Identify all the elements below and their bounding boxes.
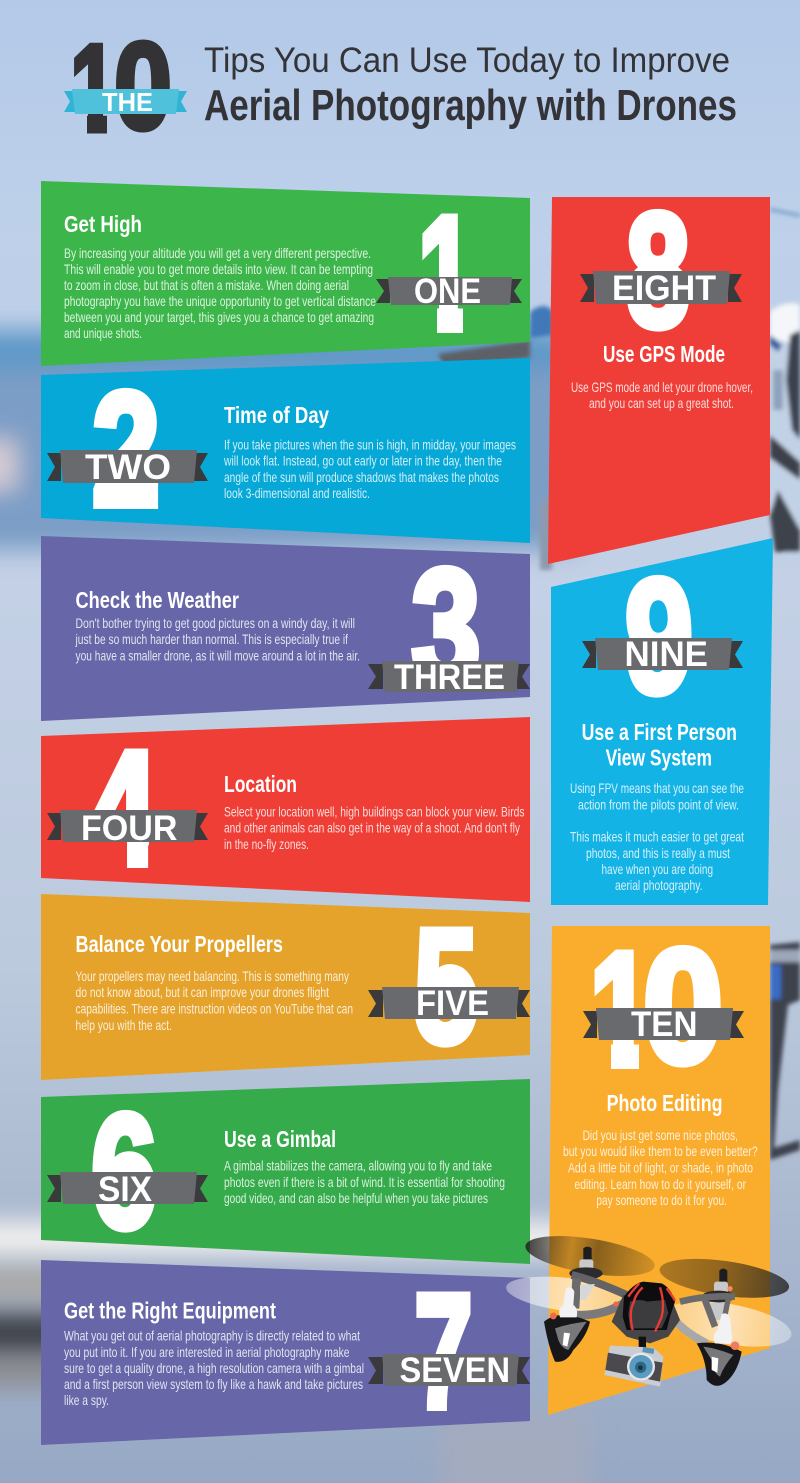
drone body [612,1282,680,1343]
body text [570,780,744,893]
THE ribbon [64,87,187,117]
arms [572,1275,735,1343]
panel 8: Use GPS Mode [548,180,770,564]
THE ribbon: THE [102,87,153,117]
heading: Photo Editing [607,1090,722,1116]
body text: Your propellers may need balancing. This is something many [76,968,349,984]
ribbon SIX: SIX [98,1170,153,1209]
body text [75,615,360,664]
body text: photos, and this is really a must [586,845,730,861]
body text: A gimbal stabilizes the camera, allowing you to fly and take [224,1158,492,1174]
body text: between you and your target, this gives you a chance to get amazing [64,309,374,325]
heading: Use a First Person [582,719,737,745]
body text: have when you are doing [602,861,713,877]
arm nub [613,1301,619,1307]
ribbon EIGHT [580,269,742,308]
heading: Use a Gimbal [224,1126,336,1152]
body text: like a spy. [64,1392,109,1408]
ribbon EIGHT: EIGHT [612,269,716,308]
body text: you have a smaller drone, as it will move around a lot in the air. [76,648,360,664]
body text [64,1328,364,1408]
number 8: 8 [626,180,690,361]
ribbon TEN [583,1005,744,1044]
big number 10: 0 [114,18,172,156]
number 6: 6 [91,1081,157,1262]
ribbon ONE [376,272,522,311]
front right leg [697,1313,742,1386]
ribbon NINE: NINE [624,635,708,674]
ribbon FOUR [47,809,208,848]
ribbon FIVE [368,984,530,1023]
number 7: 7 [414,1261,472,1442]
body text [224,1158,505,1206]
heading: Time of Day [224,402,329,428]
ribbon SEVEN: SEVEN [400,1351,510,1390]
body text: Select your location well, high buildings can block your view. Birds [224,804,524,820]
ribbon ONE: ONE [414,272,481,311]
body text [563,1127,758,1208]
body text: look 3-dimensional and realistic. [224,485,370,501]
title block [64,40,736,134]
panel 10: Photo Editing [548,916,770,1415]
ribbon SIX [47,1170,208,1209]
ribbon TWO: TWO [85,448,171,487]
body text: good video, and can also be helpful when you take pictures [224,1190,488,1206]
heading: Get the Right Equipment [64,1298,276,1324]
body text: help you with the act. [76,1017,172,1033]
ribbon FOUR: FOUR [81,809,178,848]
panel 6: Use a Gimbal [41,1079,530,1264]
camera [604,1337,663,1387]
body text: in the no-fly zones. [224,836,309,852]
body text: By increasing your altitude you will get a very different perspective. [64,245,371,261]
body text: do not know about, but it can improve your drones flight [76,984,329,1000]
body text: What you get out of aerial photography is directly related to what [64,1328,360,1344]
number 1: 1 [418,183,474,364]
ribbon TWO [47,448,208,487]
heading [582,719,737,771]
number 10 [594,944,721,1069]
front left leg [544,1287,590,1362]
heading: Use GPS Mode [603,341,725,367]
panel 2: Time of Day [41,358,530,543]
body text: sure to get a quality drone, a high resolution camera with a gimbal [64,1360,364,1376]
body text: photos even if there is a bit of wind. It is essential for shooting [224,1174,505,1190]
big number 10 [74,40,170,134]
big number 10: 1 [70,20,117,158]
number 9: 9 [625,546,693,727]
body text: angle of the sun will produce shadows that makes the photos [224,469,499,485]
body text: If you take pictures when the sun is high, in midday, your images [224,436,516,452]
body text: action from the pilots point of view. [578,796,739,812]
body text: Don't bother trying to get good pictures on a windy day, it will [76,615,355,631]
body text: and unique shots. [64,325,142,341]
ribbon NINE [582,635,743,674]
heading: Get High [64,211,142,237]
number 10: 1 [590,919,652,1100]
panel 7: Get the Right Equipment [41,1260,530,1445]
body text: photography you have the unique opportunity to get vertical distance [64,293,376,309]
rear rotors [569,1247,735,1303]
body text: This will enable you to get more details into view. It can be tempting [64,261,373,277]
ribbon THREE: THREE [394,658,505,697]
body text [571,379,753,411]
body text: to zoom in close, but that is often a mistake. When doing aerial [64,277,349,293]
panel 1: Get High [41,181,530,366]
body text: and you can set up a great shot. [589,395,734,411]
heading: View System [606,745,712,771]
back propellers [523,1229,791,1305]
body text: pay someone to do it for you. [596,1192,727,1208]
panel 3: Check the Weather [41,536,530,721]
body text [224,804,524,852]
title line 1: Tips You Can Use Today to Improve [204,41,730,80]
number 10: 0 [643,916,723,1097]
ribbon FIVE: FIVE [416,984,489,1023]
number 3: 3 [412,536,480,717]
number 4: 4 [89,718,157,899]
heading: Location [224,771,297,797]
body text [223,436,516,501]
body text [64,245,376,341]
front propellers [504,1271,795,1355]
heading: Check the Weather [76,587,239,613]
body text [76,968,353,1033]
body text: and other animals can also get in the way of a shoot. And don't fly [224,820,520,836]
body text: Did you just get some nice photos, [583,1127,738,1143]
body text: just be so much harder than normal. This is especially true if [75,631,348,647]
body text: you put into it. If you are interested in aerial photography make [64,1344,350,1360]
body text: and a first person view system to fly like a hawk and take pictures [64,1376,363,1392]
body text: aerial photography. [615,877,702,893]
heading: Balance Your Propellers [76,931,283,957]
panel 9: Use a First Person View System [551,538,773,905]
body text: capabilities. There are instruction videos on YouTube that can [76,1000,353,1016]
number 5: 5 [414,896,478,1077]
panel 4: Location [41,717,530,902]
icon: drone with camera [504,1229,795,1387]
panel 5: Balance Your Propellers [41,894,530,1080]
body text: will look flat. Instead, go out early or later in the day, then the [223,452,502,468]
ribbon TEN: TEN [631,1005,698,1044]
number 2: 2 [92,359,160,540]
